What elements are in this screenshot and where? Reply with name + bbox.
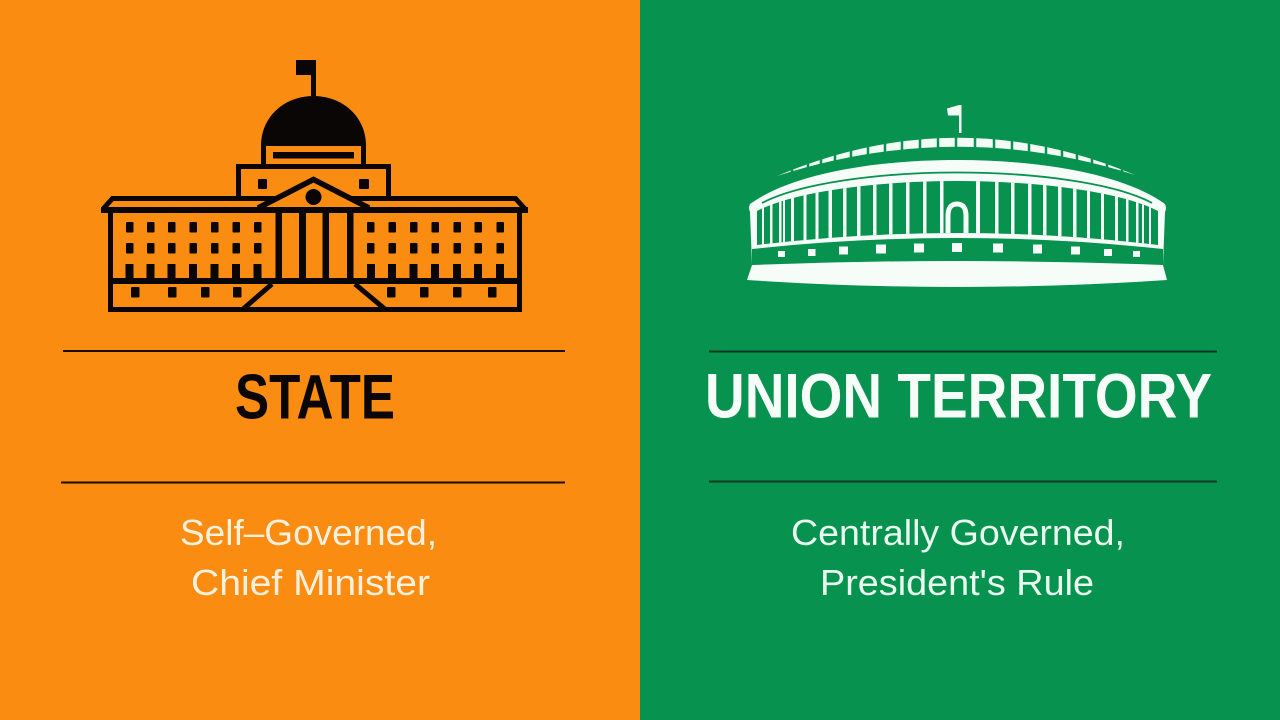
colonnade: [757, 181, 1158, 245]
flag: [296, 60, 316, 96]
panel: state: [0, 0, 640, 720]
panel: union territory: [640, 0, 1280, 720]
dashed roof arc: [777, 130, 1135, 190]
text: state description: [180, 512, 437, 603]
text: union territory description: Centrally Governed,: [791, 512, 1125, 553]
central arch: [948, 204, 966, 233]
columns: [276, 212, 354, 280]
heading: STATE: STATE: [235, 362, 395, 432]
base band: [752, 238, 1163, 265]
text: state description: Chief Minister: [191, 562, 430, 603]
heading: UNION TERRITORY: UNION TERRITORY: [705, 362, 1212, 432]
flag: [947, 105, 962, 133]
text: union territory description: [791, 512, 1125, 603]
dome: [261, 96, 366, 146]
icon: state capitol building: [101, 60, 528, 310]
text: union territory description: President's Rule: [820, 562, 1094, 603]
text: state description: Self–Governed,: [180, 512, 437, 553]
windows: [126, 222, 504, 298]
rotunda silhouette: [747, 160, 1167, 287]
icon: parliament building: [747, 105, 1167, 287]
base windows: [778, 243, 1140, 257]
